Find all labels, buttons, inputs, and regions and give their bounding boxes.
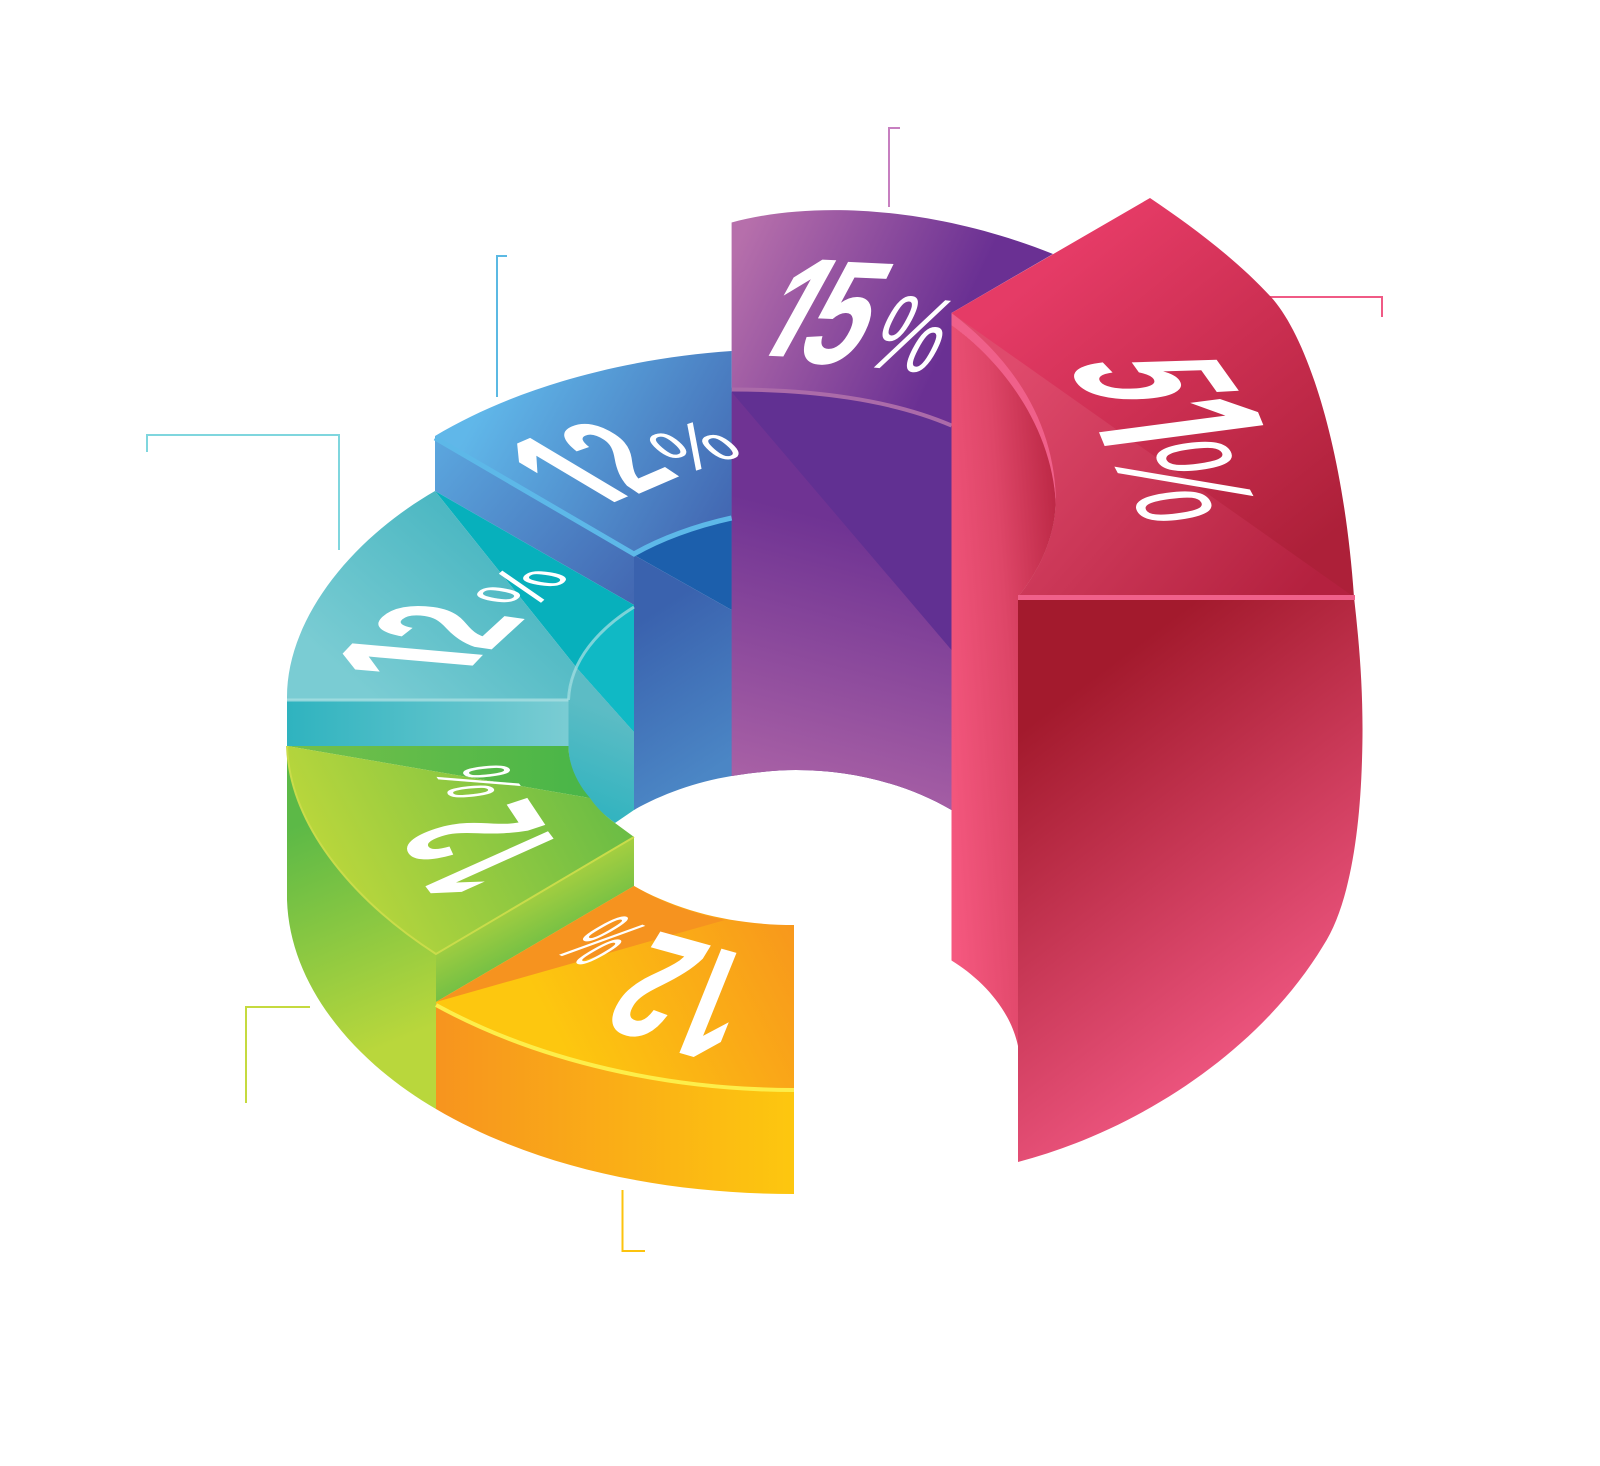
slice: teal 12% <box>287 491 634 823</box>
label: orange 12%: 2 <box>580 900 733 1071</box>
leader bracket: blue <box>497 256 507 397</box>
leader bracket: green <box>246 1007 310 1103</box>
label: green 12%: % <box>410 760 547 803</box>
label: red 51%: 1 <box>999 380 1331 477</box>
label: red 51%: % <box>1070 430 1297 532</box>
slice: orange 12% <box>436 886 794 1194</box>
label: green 12%: 2 <box>360 783 586 881</box>
label: orange 12%: % <box>531 902 673 979</box>
label: teal 12%: 1 <box>275 624 571 691</box>
label: teal 12%: % <box>452 560 592 614</box>
slice: blue 12% <box>435 351 732 810</box>
leader bracket: purple <box>889 128 900 207</box>
slice: purple 15% <box>732 210 1053 810</box>
label: blue 12%: 2 <box>523 399 710 513</box>
label: red 51% <box>1074 360 1264 521</box>
label: blue 12% <box>517 422 739 502</box>
label: teal 12%: 2 <box>326 594 566 657</box>
slice: green 12% <box>287 746 634 1109</box>
label: purple 15%: 5 <box>776 230 916 396</box>
label: purple 15%: % <box>848 273 976 395</box>
label: purple 15%: 1 <box>713 221 876 412</box>
leader bracket: orange <box>622 1190 645 1251</box>
label: purple 15% <box>768 260 951 372</box>
chart: 3D exploded donut <box>146 127 1383 1252</box>
label: green 12%: 1 <box>372 790 634 927</box>
label: orange 12%: 1 <box>644 882 787 1102</box>
label: teal 12% <box>342 570 566 672</box>
label: green 12% <box>407 766 554 894</box>
label: blue 12%: 1 <box>457 409 704 546</box>
label: red 51%: 5 <box>1017 352 1289 406</box>
label: blue 12%: % <box>630 407 760 486</box>
slice: red 51% <box>952 198 1363 1162</box>
leader bracket: red <box>1270 297 1382 317</box>
leader bracket: teal <box>147 435 339 550</box>
